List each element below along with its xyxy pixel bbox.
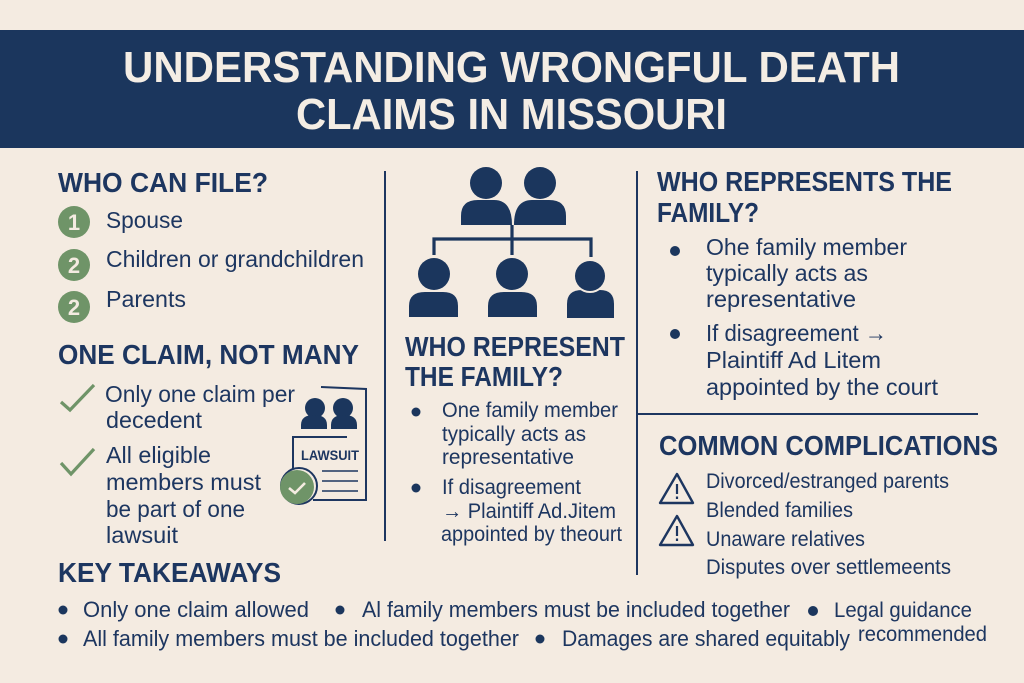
bullet list: right: appointed by the court xyxy=(706,374,939,400)
text: complications list: Blended families xyxy=(706,499,853,522)
bullet list: right: representative xyxy=(706,286,856,312)
heading: who represents xyxy=(657,166,952,228)
text: all eligible: lawsuit xyxy=(106,522,179,548)
bullet list: right: typically acts as xyxy=(706,260,868,286)
text: complications list: Divorced/estranged parents xyxy=(706,470,949,493)
panel: who represents the family (right) xyxy=(657,166,952,400)
icon: warning triangle two xyxy=(660,516,693,545)
takeaway: only one claim: Only one claim allowed xyxy=(83,597,309,622)
panel: key takeaways xyxy=(58,557,987,651)
bullet list: right xyxy=(670,234,939,400)
text: all eligible: be part of one xyxy=(106,496,245,522)
heading: who represents: WHO REPRESENTS THE xyxy=(657,166,952,197)
takeaway: family members second row: All family members must be included together xyxy=(83,626,519,651)
bullet list: right: If disagreement → xyxy=(706,320,887,346)
bullet list: center: appointed by theourt xyxy=(441,523,622,546)
bullet list: center: → Plaintiff Ad.Jitem xyxy=(442,500,616,523)
heading: who represent: WHO REPRESENT xyxy=(405,331,625,362)
icon: family tree xyxy=(409,167,614,318)
takeaway: damages: Damages are shared equitably xyxy=(562,626,850,651)
takeaway: legal guidance: recommended xyxy=(858,623,987,646)
heading: who represents: FAMILY? xyxy=(657,197,759,228)
item: parents: 2 xyxy=(68,295,80,320)
text: complications list: Unaware relatives xyxy=(706,528,865,551)
heading: common complications: COMMON COMPLICATIONS xyxy=(659,430,998,461)
takeaway: legal guidance: Legal guidance xyxy=(834,599,972,622)
item: spouse: Spouse xyxy=(106,207,183,233)
bullet list: center: If disagreement xyxy=(442,476,581,499)
text: complications list: Disputes over settlemeents xyxy=(706,556,951,579)
text: complications list xyxy=(706,470,951,579)
panel: one claim, not many xyxy=(58,339,366,548)
panel: who can file xyxy=(58,167,364,323)
bullet list: right: Ohe family member xyxy=(706,234,907,260)
icon: warning triangle one xyxy=(660,474,693,503)
takeaway: family members first row: Al family members must be included together xyxy=(362,597,790,622)
text: only one claim: decedent xyxy=(106,407,203,433)
title banner: UNDERSTANDING WRONGFUL DEATH xyxy=(123,43,900,92)
heading: key takeaways: KEY TAKEAWAYS xyxy=(58,557,281,588)
bullet list: center: representative xyxy=(442,446,574,469)
text: all eligible: All eligible xyxy=(106,442,211,468)
item: parents xyxy=(58,286,186,323)
heading: who can file: WHO CAN FILE? xyxy=(58,167,268,198)
item: children or grandchildren: 2 xyxy=(68,253,80,278)
item: spouse: 1 xyxy=(68,210,80,235)
text: only one claim xyxy=(105,381,295,433)
panel: who represent the family (center) xyxy=(405,331,625,546)
icon: lawsuit document xyxy=(280,387,366,504)
icon: check two xyxy=(61,449,94,474)
icon: lawsuit document: LAWSUIT xyxy=(301,448,360,463)
bullet list: right: Plaintiff Ad Litem xyxy=(706,347,881,373)
heading: who represent xyxy=(405,331,625,392)
takeaway: legal guidance xyxy=(808,599,987,646)
item: children or grandchildren xyxy=(58,246,364,281)
icon: check one xyxy=(61,385,94,410)
heading: who represent: THE FAMILY? xyxy=(405,361,563,392)
item: children or grandchildren: Children or grandchildren xyxy=(106,246,364,272)
item: spouse xyxy=(58,206,183,238)
text: all eligible xyxy=(106,442,262,548)
heading: one claim: ONE CLAIM, NOT MANY xyxy=(58,339,359,370)
text: all eligible: members must xyxy=(106,469,262,495)
title banner: CLAIMS IN MISSOURI xyxy=(296,90,727,139)
item: parents: Parents xyxy=(106,286,186,312)
panel: common complications xyxy=(659,430,998,579)
bullet list: center: One family member xyxy=(442,399,618,422)
bullet list: center: typically acts as xyxy=(442,423,586,446)
text: only one claim: Only one claim per xyxy=(105,381,295,407)
title banner xyxy=(0,30,1024,148)
bullet list: center xyxy=(412,399,622,546)
